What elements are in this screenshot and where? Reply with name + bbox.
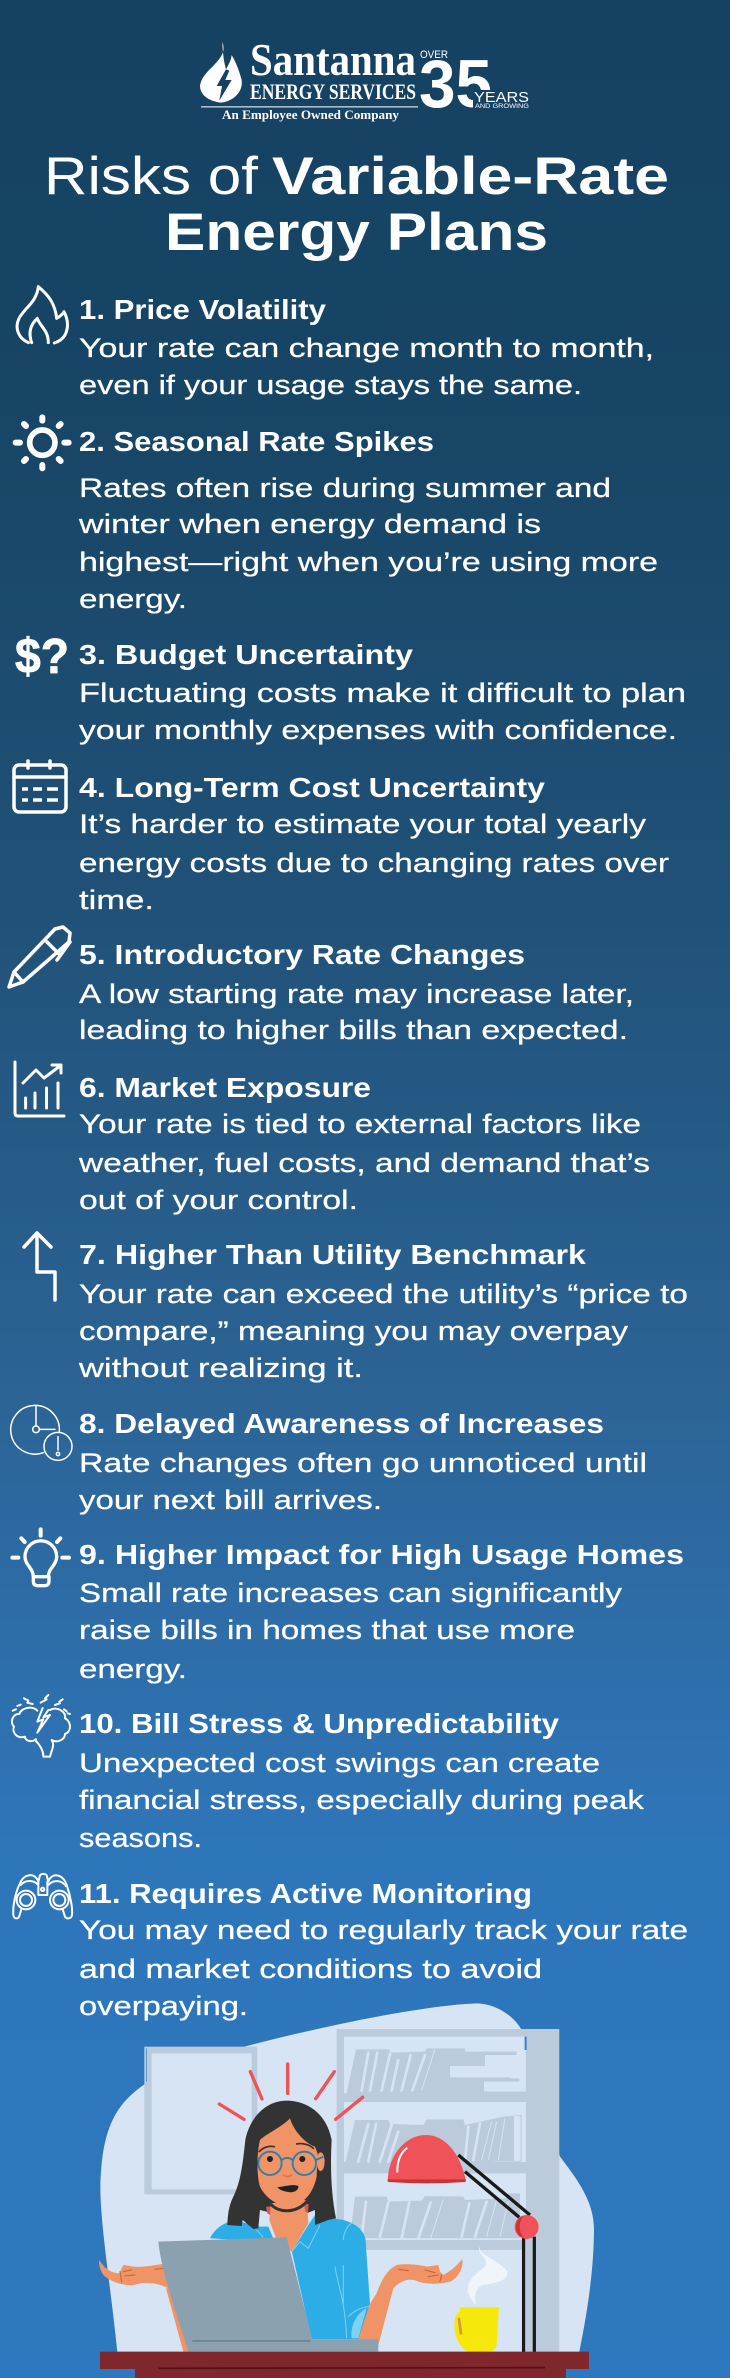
body text [79, 1448, 647, 1515]
heading: 5. Introductory Rate Changes [79, 939, 525, 970]
body text: Small rate increases can significantly [79, 1578, 623, 1608]
heading: 1. Price Volatility [79, 294, 326, 325]
item 3: budget uncertainty [15, 630, 686, 745]
body text: energy. [79, 1654, 187, 1684]
body text: raise bills in homes that use more [79, 1615, 575, 1645]
icon: clock with alert [11, 1405, 72, 1460]
heading: 10. Bill Stress & Unpredictability [79, 1708, 559, 1739]
title: Risks of [44, 147, 258, 206]
body text [79, 1748, 645, 1853]
title [44, 147, 669, 262]
body text: leading to higher bills than expected. [79, 1015, 628, 1045]
body text [79, 979, 634, 1045]
body text: Rates often rise during summer and [79, 473, 611, 503]
item 10: bill stress [12, 1695, 645, 1853]
mouth [277, 2185, 298, 2192]
eyes [267, 2156, 305, 2162]
body text [79, 678, 686, 745]
desk lamp [388, 2135, 539, 2352]
icon: calendar [14, 761, 66, 812]
body text: It’s harder to estimate your total yearly [79, 809, 647, 839]
neck shadow [266, 2204, 309, 2215]
logo rule [201, 106, 418, 108]
and growing label: AND GROWING [475, 104, 529, 110]
item 5: introductory rate changes [9, 927, 634, 1045]
body text: You may need to regularly track your rate [79, 1915, 688, 1945]
glasses [258, 2152, 323, 2175]
heading: 3. Budget Uncertainty [79, 639, 413, 670]
body text: Unexpected cost swings can create [79, 1748, 600, 1778]
body text: Your rate can change month to month, [79, 333, 654, 363]
body text: your monthly expenses with confidence. [79, 715, 677, 745]
hair [227, 2101, 336, 2229]
shirt details [257, 2222, 370, 2338]
body text [79, 333, 654, 400]
body text: A low starting rate may increase later, [79, 979, 634, 1009]
body text: out of your control. [79, 1185, 358, 1215]
left arm [99, 2260, 190, 2352]
logo flame [200, 42, 242, 103]
body text [78, 473, 658, 614]
heading: 7. Higher Than Utility Benchmark [79, 1239, 586, 1270]
title: Energy Plans [165, 203, 548, 262]
body text: weather, fuel costs, and demand that’s [78, 1148, 650, 1178]
right arm [357, 2259, 463, 2352]
item 2: seasonal rate spikes [16, 417, 658, 614]
body text: seasons. [79, 1823, 202, 1853]
body text: overpaying. [79, 1991, 248, 2021]
body text [79, 1578, 623, 1684]
shirt [210, 2215, 370, 2339]
face [257, 2118, 318, 2206]
heading: 8. Delayed Awareness of Increases [79, 1408, 604, 1439]
icon: growth chart [15, 1062, 64, 1116]
item 7: higher than utility benchmark [24, 1233, 688, 1383]
body text: compare,” meaning you may overpay [79, 1316, 629, 1346]
eyebrows [259, 2144, 313, 2152]
body text [79, 1915, 688, 2021]
heading: 2. Seasonal Rate Spikes [79, 426, 434, 457]
body text [79, 809, 669, 915]
item 4: long-term cost uncertainty [14, 761, 669, 915]
background blob [100, 2003, 594, 2352]
logo subtitle: ENERGY SERVICES [250, 79, 416, 104]
icon: pen [9, 927, 70, 987]
coffee mug [454, 2307, 499, 2352]
icon: light bulb [12, 1529, 69, 1586]
body text: Rate changes often go unnoticed until [79, 1448, 647, 1478]
nose [283, 2175, 292, 2177]
body text: Fluctuating costs make it difficult to plan [79, 678, 686, 708]
heading: 9. Higher Impact for High Usage Homes [79, 1539, 684, 1570]
body text: financial stress, especially during peak [79, 1785, 645, 1815]
body text: time. [79, 885, 154, 915]
body text: and market conditions to avoid [79, 1954, 542, 1984]
item 8: delayed awareness [11, 1405, 647, 1515]
body text: even if your usage stays the same. [79, 370, 582, 400]
bookshelf [337, 2029, 559, 2352]
over label: OVER [420, 49, 448, 61]
heading: 11. Requires Active Monitoring [79, 1878, 532, 1909]
logo [200, 34, 529, 122]
icon: sun [16, 417, 69, 468]
item 11: active monitoring [13, 1874, 688, 2021]
heading: 4. Long-Term Cost Uncertainty [79, 772, 545, 803]
coffee steam [468, 2247, 507, 2305]
desk [100, 2352, 589, 2378]
body text: winter when energy demand is [78, 509, 541, 539]
window [144, 2047, 257, 2194]
icon: flame [17, 287, 67, 343]
icon: stepped arrow [24, 1233, 55, 1300]
body text: Your rate is tied to external factors like [79, 1109, 641, 1139]
heading: 6. Market Exposure [79, 1072, 371, 1103]
neck [269, 2200, 308, 2252]
35 anniversary number: 35 [419, 46, 492, 122]
title: Variable-Rate [272, 147, 669, 206]
item 1: price volatility [17, 287, 654, 400]
body text: your next bill arrives. [79, 1485, 382, 1515]
item 6: market exposure [15, 1062, 650, 1215]
logo name: Santanna [250, 34, 416, 85]
laptop [158, 2237, 378, 2352]
body text: Your rate can exceed the utility’s “price to [79, 1279, 688, 1309]
body text: energy. [79, 584, 187, 614]
hand creases [120, 2268, 442, 2282]
illustration: stressed woman at desk [99, 2003, 594, 2378]
body text: highest—right when you’re using more [79, 547, 658, 577]
body text [78, 1279, 688, 1383]
body text: energy costs due to changing rates over [79, 848, 669, 878]
ear [317, 2152, 325, 2171]
years label: YEARS [474, 89, 529, 106]
icon: dollar and question mark: $? [15, 630, 69, 684]
icon: stressed brain [12, 1695, 70, 1757]
body text: without realizing it. [78, 1353, 363, 1383]
logo tagline: An Employee Owned Company [222, 107, 399, 122]
body text [78, 1109, 650, 1215]
icon: binoculars [13, 1874, 72, 1918]
jaw line [271, 2200, 308, 2211]
item 9: higher impact [12, 1529, 684, 1684]
sleeve cuff [351, 2308, 367, 2338]
red alarm rays [219, 2064, 363, 2119]
